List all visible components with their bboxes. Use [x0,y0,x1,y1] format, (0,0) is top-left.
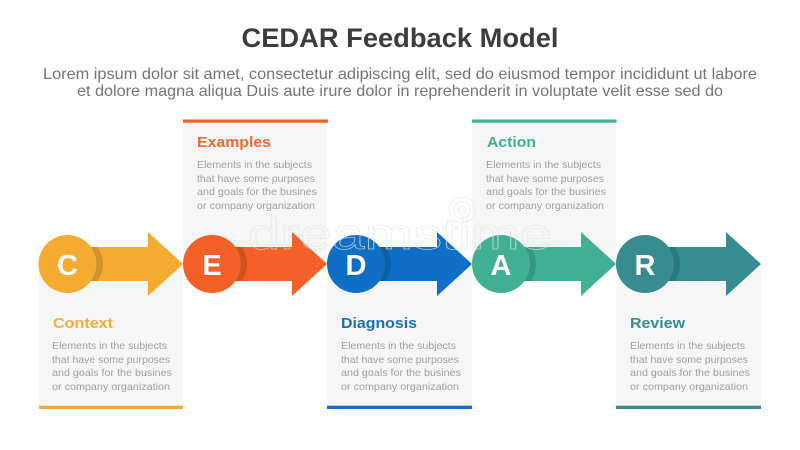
panel: diagnosis [327,264,472,409]
text block: review [630,340,750,393]
text block: examples [197,159,317,212]
text block: action: or company organization [486,200,604,212]
subtitle text: Lorem ipsum dolor sit amet, consectetur adipiscing elit, sed do eiusmod tempor incididunt ut labore [43,66,757,83]
heading: examples: Examples [197,134,271,151]
text block: action: and goals for the busines [486,186,606,198]
text block: context: that have some purposes [52,354,170,366]
text block: action [486,159,606,212]
text block: examples: and goals for the busines [197,186,317,198]
text block: diagnosis: that have some purposes [341,354,459,366]
panel: context [39,264,183,409]
arrow: D: D [346,250,366,282]
text block: diagnosis [341,340,461,393]
subtitle text [43,66,757,100]
watermark: dreamstime [248,210,552,259]
text block: context: and goals for the busines [52,367,172,379]
arrow: E: E [202,250,222,282]
arrow: C: C [57,250,78,282]
text block: review: and goals for the busines [630,367,750,379]
text block: diagnosis: Elements in the subjects [341,340,456,352]
arrow: A: A [491,250,512,282]
watermark [248,197,552,259]
heading: review: Review [630,315,685,332]
text block: diagnosis: and goals for the busines [341,367,461,379]
arrow: C [38,232,183,296]
text block: context: Elements in the subjects [52,340,167,352]
arrow: D [327,232,472,296]
arrow: E [183,232,327,296]
arrow: R: R [635,250,656,282]
subtitle text: et dolore magna aliqua Duis aute irure dolor in reprehenderit in voluptate velit esse sed do [77,83,723,100]
panel: action [472,120,616,264]
title: CEDAR Feedback Model [242,23,558,53]
text block: action: that have some purposes [486,173,604,185]
text block: review: Elements in the subjects [630,340,745,352]
text block: examples: that have some purposes [197,173,315,185]
text block: context: or company organization [52,381,170,393]
panel: examples [183,120,328,264]
text block: diagnosis: or company organization [341,381,459,393]
text block: review: or company organization [630,381,748,393]
heading: action: Action [487,134,536,151]
heading: context: Context [53,315,113,332]
text block: context [52,340,172,393]
text block: examples: or company organization [197,200,315,212]
arrow: A [472,232,616,296]
arrow: R [616,232,761,296]
panel: review [616,264,761,409]
text block: examples: Elements in the subjects [197,159,312,171]
heading: diagnosis: Diagnosis [341,315,417,332]
text block: review: that have some purposes [630,354,748,366]
text block: action: Elements in the subjects [486,159,601,171]
